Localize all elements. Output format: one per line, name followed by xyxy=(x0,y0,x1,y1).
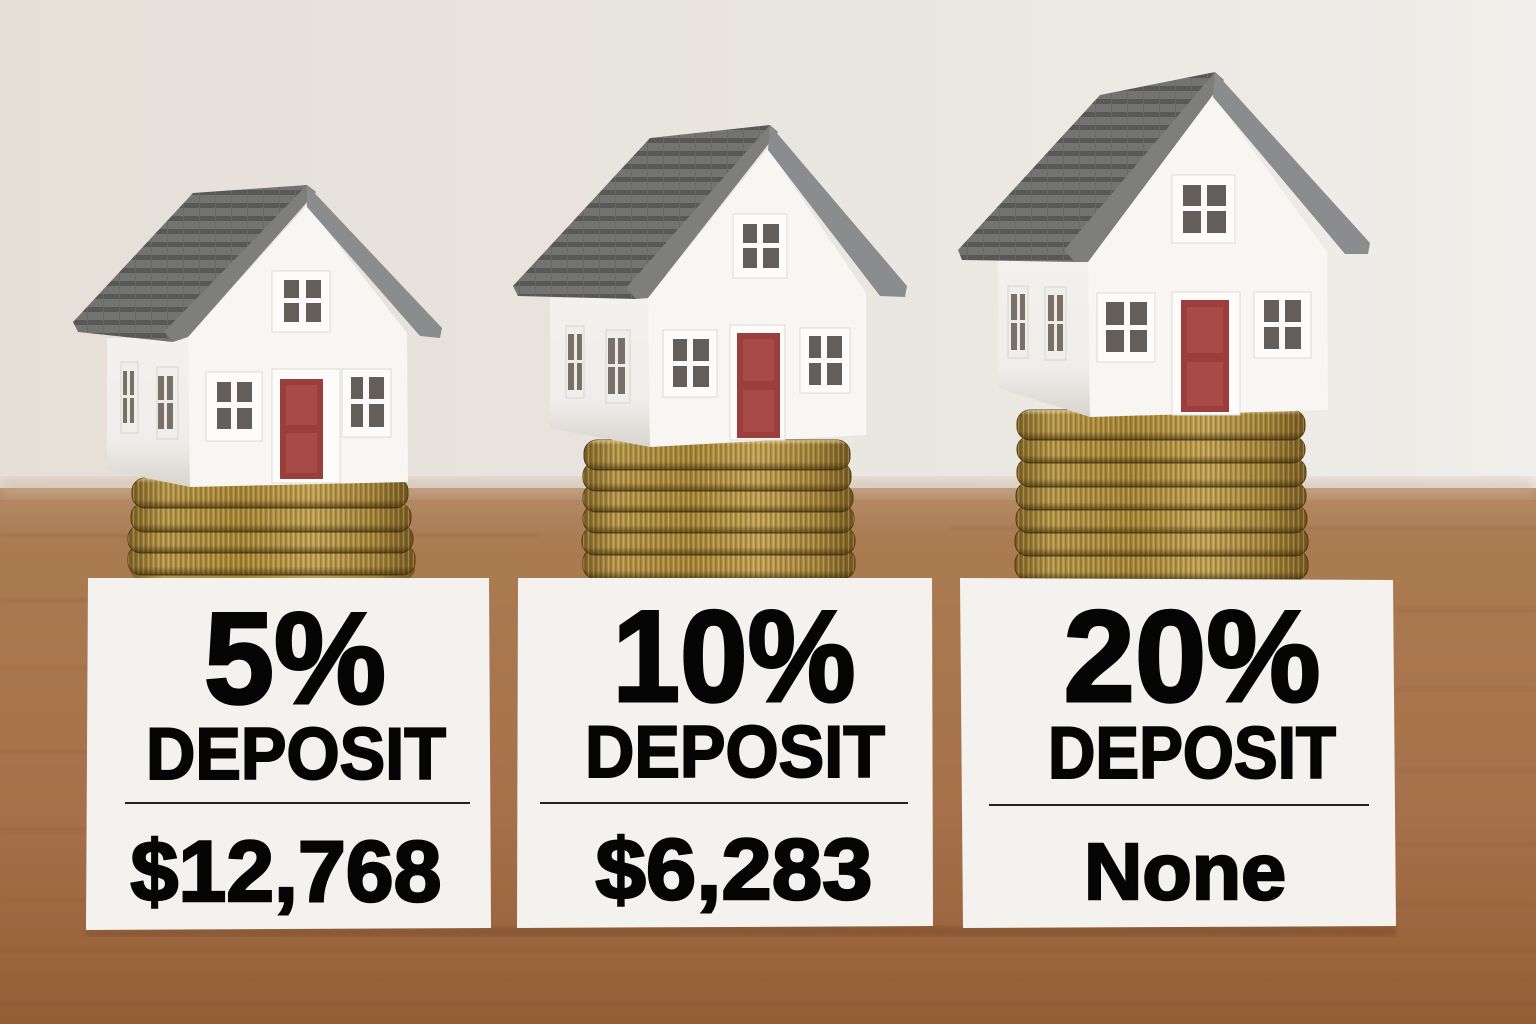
card: 5% deposit xyxy=(86,578,491,930)
house 2 xyxy=(513,125,907,447)
house 3 xyxy=(958,72,1370,417)
amount: $6,283 xyxy=(596,822,872,918)
label deposit: DEPOSIT xyxy=(1048,713,1336,794)
percentage 20%: 20% xyxy=(1064,583,1320,729)
amount: $12,768 xyxy=(130,824,442,920)
coin stack 3 xyxy=(1015,410,1308,580)
label deposit: DEPOSIT xyxy=(585,712,885,793)
card: 10% deposit xyxy=(517,578,933,928)
wall background xyxy=(0,0,1536,500)
card: 20% deposit xyxy=(960,578,1396,928)
percentage 5%: 5% xyxy=(204,585,386,731)
label deposit: DEPOSIT xyxy=(146,714,446,795)
house 1 xyxy=(73,185,442,487)
coin stack 1 xyxy=(128,478,415,580)
coin stack 2 xyxy=(582,440,855,579)
wooden table xyxy=(0,478,1536,1024)
amount: None xyxy=(1084,827,1286,916)
percentage 10%: 10% xyxy=(612,583,856,729)
